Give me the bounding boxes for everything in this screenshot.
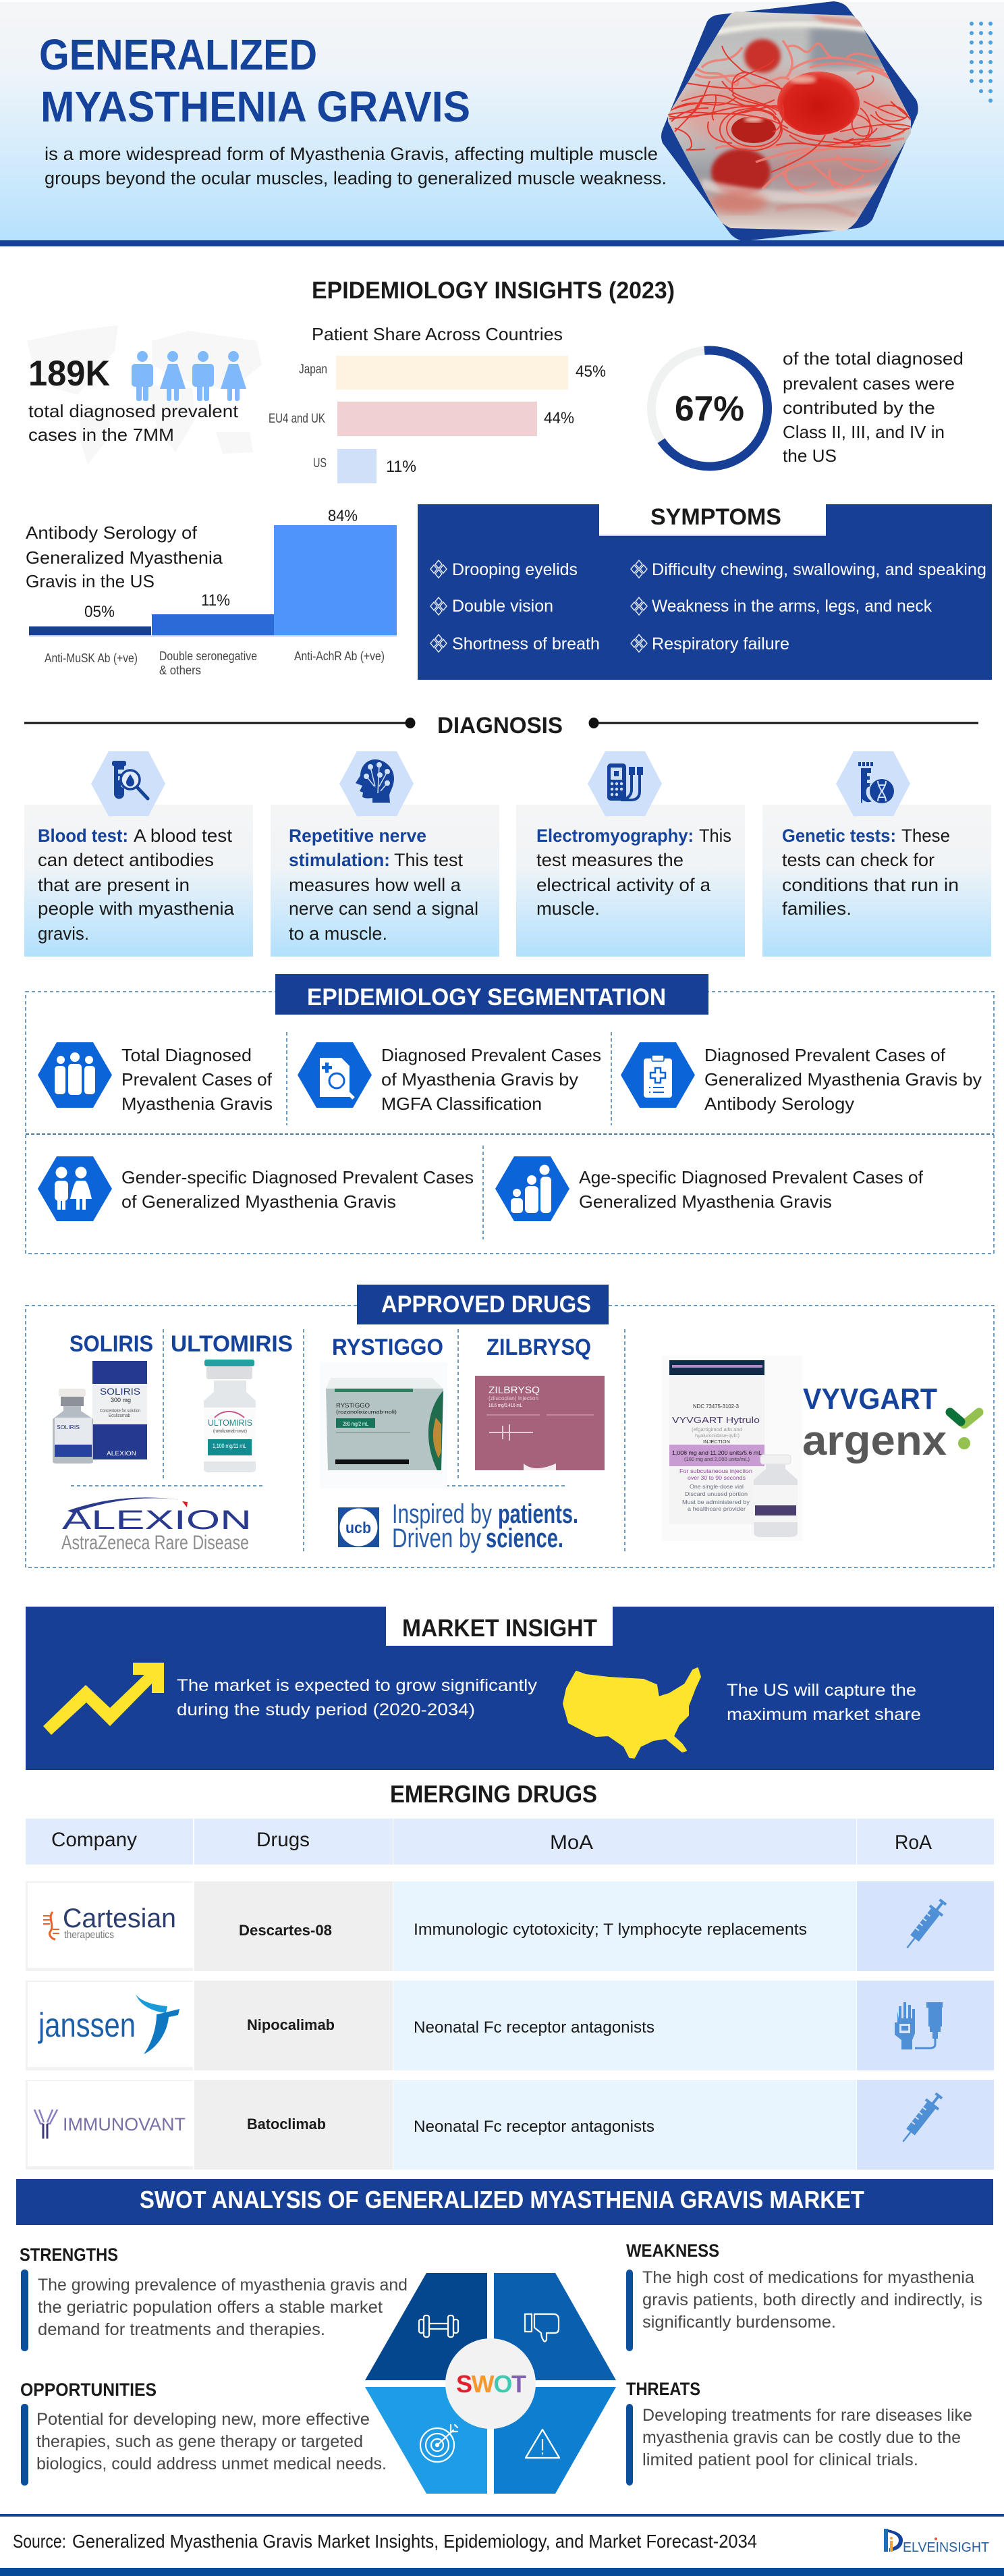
row: Immunovant	[26, 2080, 994, 2170]
bar chart: antibody serology: 84%	[328, 507, 358, 525]
row: Cartesian: Descartes-08	[239, 1922, 332, 1939]
people icons	[132, 351, 246, 401]
symptom list	[452, 560, 986, 653]
logo: Cartesian: therapeutics	[64, 1929, 114, 1941]
card: electromyography: This	[699, 826, 731, 846]
image: Soliris box and vial: 300 mg	[111, 1397, 131, 1403]
bar chart: patient share across countries: Japan	[299, 363, 327, 377]
card: blood test: people with myasthenia	[38, 898, 235, 919]
logo: Immunovant	[34, 2110, 186, 2139]
opportunities	[20, 2380, 387, 2486]
strengths: the geriatric population offers a stable market	[38, 2298, 383, 2317]
bar chart: patient share across countries	[269, 324, 606, 483]
title: GENERALIZED	[39, 30, 317, 79]
drug names: ZILBRYSQ	[486, 1335, 591, 1360]
image: Soliris box and vial	[53, 1361, 147, 1464]
text: antibody serology: Generalized Myasthenia Gravis by	[704, 1069, 982, 1090]
bar chart: patient share across countries: Patient Share Across Countries	[312, 324, 563, 344]
panel: diagnosis cards	[24, 751, 991, 957]
bar chart: patient share across countries: 44%	[544, 409, 574, 427]
image: Vyvgart box and vial: VYVGART Hytrulo	[672, 1415, 760, 1425]
card: electromyography: muscle.	[536, 898, 600, 919]
text: MGFA classification	[381, 1045, 601, 1114]
stat number: 189K	[28, 354, 110, 394]
card: repetitive nerve stimulation	[271, 805, 499, 957]
text: MGFA classification: of Myasthenia Gravis by	[381, 1069, 578, 1090]
icon: blood test tube and magnifier	[91, 751, 165, 816]
card: blood test: gravis.	[38, 923, 89, 944]
image: Soliris box and vial: ALEXION	[107, 1450, 136, 1457]
bar chart: patient share across countries: 45%	[576, 363, 606, 381]
icon: syringe	[901, 1897, 949, 1953]
opportunities: OPPORTUNITIES	[20, 2380, 157, 2400]
bar chart: antibody serology: Antibody Serology of	[26, 522, 198, 543]
symptom list: Difficulty chewing, swallowing, and speaking	[652, 560, 986, 579]
image: Vyvgart box and vial: (180 mg and 2,000 units/mL)	[684, 1457, 750, 1462]
logo: UCB: ucb	[345, 1519, 371, 1536]
card: repetitive nerve stimulation: This test	[394, 850, 463, 870]
subtitle text	[45, 144, 667, 188]
icon: family group	[38, 1042, 112, 1108]
panel: 189K prevalent cases	[27, 325, 262, 464]
weakness: significantly burdensome.	[642, 2313, 836, 2332]
image: Soliris box and vial: Eculizumab	[109, 1414, 130, 1418]
SWOT letters: SWOT	[456, 2370, 526, 2398]
heading: approved drugs	[357, 1285, 609, 1324]
icon: warning	[526, 2430, 559, 2458]
symptom list: Weakness in the arms, legs, and neck	[652, 597, 932, 616]
image: Vyvgart box and vial: Must be administered by	[682, 1499, 750, 1505]
bar chart: antibody serology: 05%	[84, 603, 115, 621]
text: total diagnosed: Myasthenia Gravis	[121, 1094, 273, 1114]
image: Vyvgart box and vial: INJECTION	[703, 1440, 730, 1445]
bar chart: antibody serology	[26, 507, 397, 677]
text: antibody serology: Antibody Serology	[704, 1094, 854, 1114]
logo: Immunovant: IMMUNOVANT	[63, 2114, 186, 2135]
source text: Source:	[13, 2531, 66, 2552]
image: Vyvgart box and vial: One single-dose vial	[690, 1484, 744, 1490]
image: Vyvgart box and vial: over 30 to 90 seconds	[688, 1475, 746, 1481]
icon: growth arrow	[43, 1663, 164, 1735]
panel: symptoms	[418, 495, 992, 680]
text: US share: maximum market share	[727, 1705, 921, 1724]
image: Soliris box and vial: SOLIRIS	[100, 1386, 140, 1397]
card: electromyography	[516, 805, 745, 957]
threats: Developing treatments for rare diseases like	[642, 2406, 972, 2425]
row: Janssen: Nipocalimab	[247, 2016, 335, 2033]
card: repetitive nerve stimulation: measures how well a	[289, 875, 462, 895]
text: 67% description: Class II, III, and IV in	[783, 422, 945, 442]
threats: THREATS	[626, 2379, 700, 2399]
logo: DelveInsight: ELVEINSIGHT	[903, 2540, 989, 2555]
donut chart: 67%: 67%	[675, 390, 744, 429]
heading: symptoms: SYMPTOMS	[650, 504, 781, 530]
image: Vyvgart box and vial: a healthcare provider	[688, 1506, 746, 1512]
icon: gender pair	[38, 1156, 112, 1221]
image: Zilbrysq box: ZILBRYSQ	[489, 1385, 540, 1396]
text: total diagnosed: Total Diagnosed	[121, 1045, 252, 1065]
text: US share	[727, 1681, 921, 1724]
image: Ultomiris vial: (ravulizumab-cwvz)	[213, 1429, 247, 1434]
decorative dots	[970, 22, 993, 103]
logo: Alexion: AstraZeneca Rare Disease	[61, 1532, 249, 1554]
row: Janssen	[26, 1981, 994, 2070]
table header: RoA	[895, 1831, 932, 1854]
threats: limited patient pool for clinical trials.	[642, 2450, 918, 2469]
bar chart: antibody serology: Anti-AchR Ab (+ve)	[294, 649, 385, 663]
weakness	[626, 2240, 982, 2351]
strengths: STRENGTHS	[20, 2245, 118, 2265]
card: genetic tests: Genetic tests:	[782, 826, 896, 846]
panel: market insight	[26, 1605, 994, 1770]
text: age-specific: Generalized Myasthenia Gravis	[579, 1191, 832, 1212]
icon: document with magnifier	[298, 1042, 372, 1108]
text: gender-specific: Gender-specific Diagnosed Prevalent Cases	[121, 1167, 474, 1187]
image: Vyvgart box and vial	[662, 1356, 802, 1541]
icon: hand with infusion	[895, 2002, 943, 2049]
title: MYASTHENIA GRAVIS	[40, 82, 470, 131]
heading: SWOT banner: SWOT ANALYSIS OF GENERALIZED MYASTHENIA GRAVIS MARKET	[140, 2186, 864, 2213]
text: MGFA classification: MGFA Classification	[381, 1094, 542, 1114]
heading: market insight: MARKET INSIGHT	[402, 1614, 597, 1642]
image: Vyvgart box and vial: Discard unused portion	[685, 1491, 748, 1497]
text: 67% description: the US	[783, 446, 837, 466]
text: gender-specific	[121, 1167, 474, 1212]
SWOT diagram	[365, 2273, 616, 2494]
card: blood test	[24, 805, 253, 957]
card: genetic tests: tests can check for	[782, 850, 935, 870]
filament haze	[671, 74, 908, 149]
card: blood test: can detect antibodies	[38, 850, 214, 870]
panel: SWOT	[20, 2240, 982, 2494]
title	[39, 30, 470, 131]
card: genetic tests: conditions that run in	[782, 875, 959, 895]
source text: Generalized Myasthenia Gravis Market Insights, Epidemiology, and Market Forecast-2034	[72, 2531, 757, 2552]
icon: electromyography device	[588, 751, 662, 816]
heading: epidemiology segmentation	[275, 974, 708, 1015]
icon: dumbbell	[419, 2315, 458, 2337]
row: Cartesian	[26, 1881, 994, 1971]
card: repetitive nerve stimulation: Repetitive nerve	[289, 826, 426, 846]
image: Zilbrysq box	[475, 1376, 605, 1470]
text: antibody serology	[704, 1045, 982, 1114]
bar chart: antibody serology: 11%	[201, 591, 230, 610]
table header	[26, 1819, 994, 1864]
weakness: gravis patients, both directly and indirectly, is	[642, 2290, 982, 2309]
logo: UCB: Driven by	[392, 1524, 481, 1553]
image: Ultomiris vial: ULTOMIRIS	[208, 1418, 252, 1428]
heading: approved drugs: APPROVED DRUGS	[381, 1291, 591, 1318]
symptom list: Drooping eyelids	[452, 560, 578, 579]
text: US share: The US will capture the	[727, 1681, 916, 1700]
image: Rystiggo box: (rozanolixizumab-noli)	[336, 1410, 397, 1415]
logo: Alexion	[61, 1497, 252, 1554]
logo: Janssen: janssen	[37, 2006, 136, 2044]
panel: approved drugs	[26, 1285, 994, 1567]
weakness: WEAKNESS	[626, 2240, 719, 2261]
drug names: ULTOMIRIS	[171, 1331, 293, 1357]
image: Vyvgart box and vial: For subcutaneous injection	[679, 1468, 752, 1474]
bar chart: patient share across countries: 11%	[386, 458, 416, 476]
heading: emerging drugs: EMERGING DRUGS	[390, 1780, 597, 1808]
stat caption: cases in the 7MM	[28, 425, 174, 445]
drug names: RYSTIGGO	[332, 1335, 443, 1360]
image: Rystiggo box: RYSTIGGO	[336, 1402, 370, 1409]
logo: Janssen	[37, 1994, 179, 2054]
text: 67% description: of the total diagnosed	[783, 348, 964, 369]
logo: Cartesian	[43, 1904, 176, 1941]
text: 67% description: contributed by the	[783, 398, 935, 418]
heading: epidemiology segmentation: EPIDEMIOLOGY SEGMENTATION	[307, 984, 666, 1011]
image: Ultomiris vial: 1,100 mg/11 mL	[213, 1443, 246, 1449]
logo: Cartesian: Cartesian	[63, 1904, 176, 1933]
icon: genetic tube and DNA	[836, 751, 910, 816]
logo: Vyvgart and argenx: VYVGART	[803, 1383, 937, 1416]
stat caption: total diagnosed prevalent	[28, 401, 239, 421]
bar chart: patient share across countries: US	[313, 456, 327, 471]
bar chart: patient share across countries: EU4 and UK	[269, 412, 325, 426]
icon: age group	[495, 1156, 569, 1221]
weakness: The high cost of medications for myasthenia	[642, 2268, 974, 2287]
icon: thumbs down	[525, 2314, 559, 2342]
symptom icons	[430, 560, 647, 652]
drug names	[69, 1331, 591, 1360]
table header: Company	[51, 1829, 137, 1851]
bar chart: antibody serology: Gravis in the US	[26, 571, 155, 591]
image: Vyvgart box and vial: (efgartigimod alfa and	[692, 1428, 742, 1432]
image: Vyvgart box and vial: NDC 73475-3102-3	[693, 1403, 740, 1410]
bar chart: antibody serology: Double seronegative	[159, 649, 257, 663]
card: genetic tests: These	[901, 826, 950, 846]
symptom list: Respiratory failure	[652, 635, 789, 653]
subtitle text: is a more widespread form of Myasthenia Gravis, affecting multiple muscle	[45, 144, 658, 164]
card: blood test: that are present in	[38, 875, 190, 895]
text: 67% description: prevalent cases were	[783, 373, 955, 394]
logo: Vyvgart and argenx	[802, 1383, 979, 1464]
subtitle text: groups beyond the ocular muscles, leading to generalized muscle weakness.	[45, 168, 667, 188]
logo: Vyvgart and argenx: argenx	[802, 1418, 947, 1464]
bar chart: antibody serology: Generalized Myasthenia	[26, 547, 223, 568]
footer	[0, 2514, 1004, 2576]
text: 67% description	[783, 348, 964, 466]
text: age-specific: Age-specific Diagnosed Prevalent Cases of	[579, 1167, 924, 1187]
card: repetitive nerve stimulation: stimulation:	[289, 850, 390, 870]
text: age-specific	[579, 1167, 924, 1212]
row: Immunovant: Batoclimab	[247, 2116, 326, 2132]
panel: epidemiology segmentation	[26, 974, 994, 1254]
heading: SWOT banner	[16, 2179, 993, 2225]
text: market growth: The market is expected to grow significantly	[177, 1676, 538, 1695]
card: electromyography: electrical activity of a	[536, 875, 711, 895]
image: Zilbrysq box: 16.6 mg/0.416 mL	[489, 1403, 522, 1408]
opportunities: Potential for developing new, more effective	[36, 2410, 370, 2429]
image: Rystiggo box: 280 mg/2 mL	[343, 1421, 368, 1427]
logo: UCB: Inspired by	[392, 1499, 492, 1529]
icon: syringe	[897, 2091, 945, 2147]
opportunities: therapies, such as gene therapy or targeted	[36, 2432, 363, 2451]
text: MGFA classification: Diagnosed Prevalent Cases	[381, 1045, 601, 1065]
card: blood test: Blood test:	[38, 826, 128, 846]
strengths	[20, 2245, 408, 2351]
icon: clipboard	[621, 1042, 695, 1108]
card: repetitive nerve stimulation: nerve can send a signal	[289, 898, 478, 919]
threats: myasthenia gravis can be costly due to the	[642, 2428, 961, 2447]
icon: US map	[563, 1668, 700, 1758]
card: blood test: A blood test	[134, 826, 233, 846]
heading: diagnosis	[24, 713, 978, 739]
icon: head with nerve nodes	[339, 751, 414, 816]
image: Vyvgart box and vial: 1,008 mg and 11,200 units/5.6 mL	[672, 1450, 762, 1456]
heading: diagnosis: DIAGNOSIS	[437, 713, 563, 739]
table header: Drugs	[256, 1829, 310, 1851]
text: total diagnosed	[121, 1045, 273, 1114]
text: gender-specific: of Generalized Myasthenia Gravis	[121, 1191, 396, 1212]
text: market growth: during the study period (2020-2034)	[177, 1700, 475, 1719]
image: Soliris box and vial: Concentrate for solution	[100, 1409, 140, 1414]
strengths: demand for treatments and therapies.	[38, 2320, 325, 2339]
text: market growth	[177, 1676, 538, 1719]
world map background	[27, 325, 262, 464]
icon: target	[420, 2425, 457, 2462]
text: total diagnosed: Prevalent Cases of	[121, 1069, 273, 1090]
hero image: blood cells in hexagon	[661, 1, 918, 241]
bar chart: antibody serology: & others	[159, 664, 201, 677]
heading: epidemiology insights: EPIDEMIOLOGY INSIGHTS (2023)	[312, 277, 675, 304]
logo: UCB	[338, 1499, 578, 1553]
header banner	[0, 1, 1004, 246]
card: repetitive nerve stimulation: to a muscle.	[289, 923, 387, 944]
logo: UCB: patients.	[498, 1499, 578, 1529]
donut chart: 67%	[646, 346, 773, 471]
symptom list: Double vision	[452, 597, 553, 616]
image: Rystiggo box	[320, 1362, 447, 1488]
logo: Alexion: ALEXION	[62, 1505, 252, 1535]
card: genetic tests	[762, 805, 991, 957]
card: electromyography: Electromyography:	[536, 826, 694, 846]
table: emerging drugs	[26, 1819, 994, 2170]
image: Ultomiris vial	[204, 1360, 256, 1472]
image: Soliris box and vial: SOLIRIS	[57, 1424, 80, 1430]
logo: UCB: science.	[486, 1524, 563, 1553]
image: Zilbrysq box: (zilucoplan) Injection	[489, 1395, 538, 1401]
row: Cartesian: Immunologic cytotoxicity; T lymphocyte replacements	[414, 1921, 807, 1939]
symptom list: Shortness of breath	[452, 635, 600, 653]
text: antibody serology: Diagnosed Prevalent Cases of	[704, 1045, 946, 1065]
table header: MoA	[550, 1831, 593, 1854]
row: Janssen: Neonatal Fc receptor antagonists	[414, 2018, 654, 2037]
image: Vyvgart box and vial: hyaluronidase-qvfc)	[695, 1434, 740, 1439]
bar chart: antibody serology: Anti-MuSK Ab (+ve)	[45, 651, 138, 665]
opportunities: biologics, could address unmet medical needs.	[36, 2454, 387, 2473]
stat caption	[28, 401, 239, 445]
card: genetic tests: families.	[782, 898, 852, 919]
card: electromyography: test measures the	[536, 850, 684, 870]
strengths: The growing prevalence of myasthenia gravis and	[38, 2276, 408, 2295]
drug names: SOLIRIS	[69, 1331, 153, 1357]
row: Immunovant: Neonatal Fc receptor antagonists	[414, 2118, 654, 2136]
logo: DelveInsight	[884, 2529, 989, 2555]
threats	[626, 2379, 972, 2486]
